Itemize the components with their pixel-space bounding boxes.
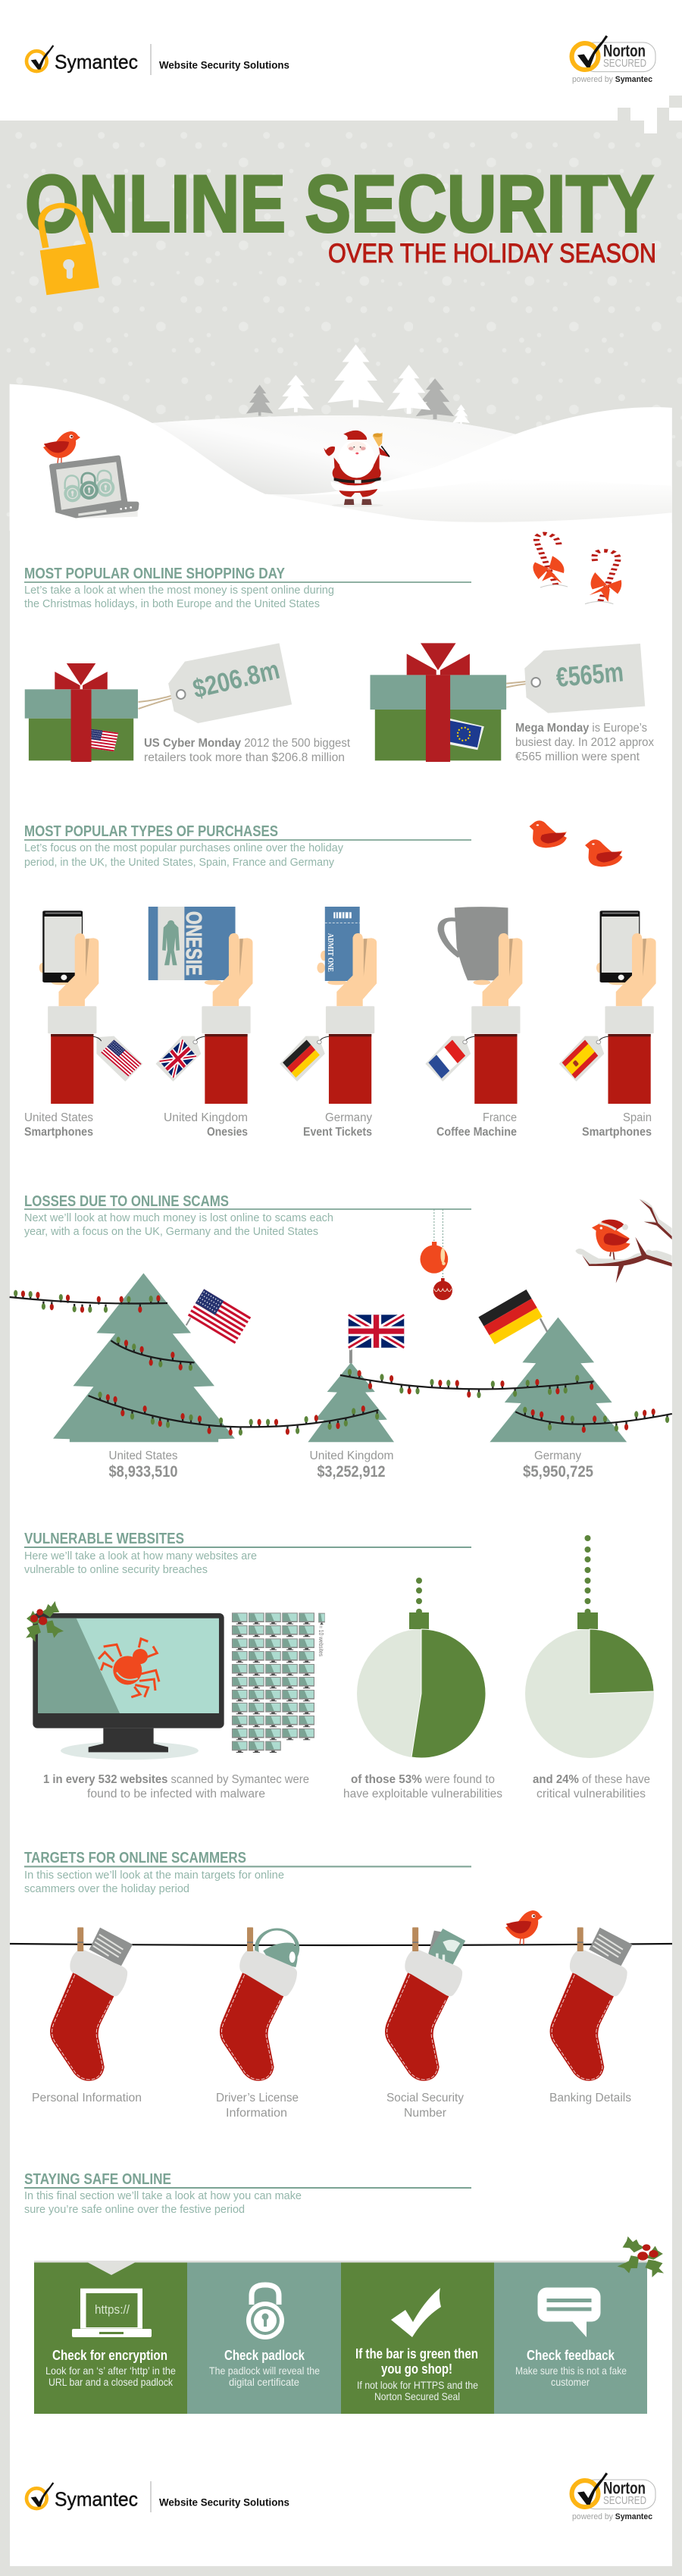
stocking labels xyxy=(32,2092,631,2120)
norton seal: powered by Symantec xyxy=(572,75,652,84)
intro text: Let’s focus on the most popular purchases online over the holiday xyxy=(24,842,344,854)
tip: check for encryption xyxy=(34,2262,187,2414)
caption: mega monday: Mega Monday is Europe’s xyxy=(515,722,647,735)
caption: critical: critical vulnerabilities xyxy=(537,1788,646,1800)
section: targets xyxy=(10,1850,672,2120)
caption: critical: and 24% of these have xyxy=(533,1773,650,1786)
intro text xyxy=(24,842,344,869)
label: onesie: ONESIE xyxy=(181,911,205,976)
stocking labels: Information xyxy=(226,2107,287,2120)
intro text: sure you’re safe online over the festive period xyxy=(24,2204,245,2216)
heading: TARGETS FOR ONLINE SCAMMERS xyxy=(24,1850,246,1866)
intro text: Next we’ll look at how much money is lost online to scams each xyxy=(24,1212,333,1224)
divider rule xyxy=(24,1547,471,1548)
bauble chart: 53% xyxy=(357,1578,486,1758)
symantec logo: Website Security Solutions xyxy=(159,59,289,71)
heading: VULNERABLE WEBSITES xyxy=(24,1531,184,1547)
purchase: spain smartphone xyxy=(559,910,656,1104)
stocking labels: Social Security xyxy=(386,2092,464,2104)
footer xyxy=(27,2473,655,2521)
caption: us cyber monday: US Cyber Monday 2012 the 500 biggest xyxy=(144,737,351,750)
tip: check feedback xyxy=(494,2262,647,2414)
tip: check padlock: The padlock will reveal the xyxy=(209,2364,320,2377)
labels: countries and products: Smartphones xyxy=(24,1126,93,1139)
trees xyxy=(246,344,470,425)
legend: 10 websites: = 10 websites xyxy=(318,1625,324,1656)
icon: candy canes xyxy=(533,534,621,604)
norton seal: Norton xyxy=(603,2479,646,2497)
section: vulnerable websites xyxy=(24,1531,654,1800)
tree: united kingdom xyxy=(308,1315,404,1442)
intro text: Let’s take a look at when the most money is spent online during xyxy=(24,584,334,597)
intro text: In this final section we’ll take a look at how you can make xyxy=(24,2190,302,2202)
section: purchases xyxy=(24,820,656,1139)
heading: STAYING SAFE ONLINE xyxy=(24,2171,171,2188)
purchase: france mug xyxy=(425,907,522,1104)
caption: exploitable: of those 53% were found to xyxy=(351,1773,495,1786)
stocking: personal information xyxy=(50,1927,133,2081)
stocking labels: Personal Information xyxy=(32,2092,142,2104)
labels: countries and products: France xyxy=(483,1111,517,1124)
symantec logo: Symantec xyxy=(55,51,138,74)
labels: countries and products xyxy=(24,1111,652,1139)
caption: malware: 1 in every 532 websites scanned by Symantec were xyxy=(43,1773,309,1786)
heading: MOST POPULAR ONLINE SHOPPING DAY xyxy=(24,566,286,582)
stocking: social security xyxy=(385,1927,465,2081)
intro text: period, in the UK, the United States, Spain, France and Germany xyxy=(24,857,335,869)
washing line xyxy=(10,1944,672,1945)
icon grid: 532 websites xyxy=(232,1612,325,1753)
icon: baubles xyxy=(420,1209,452,1300)
divider rule xyxy=(24,581,471,583)
intro text: scammers over the holiday period xyxy=(24,1883,189,1895)
stocking labels: Banking Details xyxy=(549,2092,631,2104)
tip: green bar: you go shop! xyxy=(381,2361,452,2377)
purchase: united states smartphone xyxy=(39,910,142,1104)
loss labels: $5,950,725 xyxy=(523,1463,593,1481)
tip: check padlock xyxy=(187,2262,341,2414)
labels: countries and products: Event Tickets xyxy=(303,1126,372,1139)
intro text: In this section we’ll look at the main targets for online xyxy=(24,1869,284,1882)
snow pattern xyxy=(0,129,682,523)
icon: padlock xyxy=(40,205,99,295)
white content panel xyxy=(10,523,672,2566)
tip: check padlock: digital certificate xyxy=(229,2376,299,2388)
price tag: europe: €565m xyxy=(555,656,624,693)
tip: check for encryption: Look for an ‘s’ after ‘http’ in the xyxy=(45,2364,176,2377)
tree: united states xyxy=(53,1273,251,1442)
divider rule xyxy=(24,1866,471,1867)
norton seal: SECURED xyxy=(603,57,646,70)
loss labels: $3,252,912 xyxy=(317,1463,385,1481)
loss labels xyxy=(109,1449,593,1481)
intro text: the Christmas holidays, in both Europe and the United States xyxy=(24,598,320,610)
tip: green bar: Norton Secured Seal xyxy=(374,2390,460,2402)
norton seal xyxy=(572,36,655,84)
intro text xyxy=(24,1550,257,1576)
intro text xyxy=(24,2190,302,2216)
icon: santa xyxy=(324,431,389,507)
icon: malware bug xyxy=(99,1639,159,1697)
divider rule xyxy=(24,1208,471,1210)
icon: bird on laptop xyxy=(43,431,80,463)
tip: check for encryption: Check for encryption xyxy=(52,2348,167,2363)
stocking: driver's license xyxy=(220,1927,298,2081)
divider rule xyxy=(24,2187,471,2189)
tip: check for encryption: https:// xyxy=(95,2302,130,2317)
bauble chart: 24% xyxy=(525,1535,654,1758)
loss labels: United States xyxy=(109,1449,178,1462)
intro text: year, with a focus on the UK, Germany and the United States xyxy=(24,1226,318,1238)
labels: countries and products: Onesies xyxy=(207,1126,248,1139)
tip: green bar: If not look for HTTPS and the xyxy=(357,2379,478,2391)
tip: check feedback: Check feedback xyxy=(527,2348,615,2363)
purchase: germany ticket xyxy=(280,907,377,1104)
caption: us cyber monday: retailers took more than $206.8 million xyxy=(144,751,345,764)
norton seal xyxy=(572,2473,655,2521)
symantec logo xyxy=(27,2481,289,2512)
tip: check padlock: Check padlock xyxy=(224,2348,305,2363)
icon: two birds xyxy=(530,820,622,867)
caption: malware: found to be infected with malware xyxy=(87,1788,265,1800)
labels: countries and products: Spain xyxy=(623,1111,652,1124)
heading: MOST POPULAR TYPES OF PURCHASES xyxy=(24,823,278,840)
norton seal: SECURED xyxy=(603,2494,646,2507)
pixel blocks xyxy=(618,96,682,133)
tip: green bar xyxy=(341,2262,494,2414)
icon: infected monitor xyxy=(33,1613,224,1760)
tip: check feedback: Make sure this is not a fake xyxy=(515,2364,627,2377)
snowy hills xyxy=(10,344,672,531)
intro text xyxy=(24,584,334,610)
icon: laptop with padlocks xyxy=(49,456,139,519)
stocking: banking details xyxy=(550,1927,633,2081)
caption: exploitable xyxy=(343,1773,502,1800)
price tag: us xyxy=(139,643,292,723)
norton seal: Norton xyxy=(603,41,646,61)
caption: malware xyxy=(43,1773,309,1800)
stocking labels: Number xyxy=(404,2107,446,2120)
icon: holly on monitor xyxy=(26,1601,64,1642)
label: admit one: ADMIT ONE xyxy=(326,933,335,972)
icon: bird on line xyxy=(505,1910,543,1945)
loss labels: $8,933,510 xyxy=(109,1463,177,1481)
icon: holly on panel xyxy=(618,2236,664,2277)
labels: countries and products: Coffee Machine xyxy=(436,1126,517,1139)
price tag: us: $206.8m xyxy=(190,655,283,704)
norton seal: powered by Symantec xyxy=(572,2512,652,2521)
purchase: united kingdom onesie xyxy=(149,907,252,1104)
caption: us cyber monday xyxy=(144,737,351,764)
panel: tips xyxy=(34,2261,647,2414)
labels: countries and products: Germany xyxy=(325,1111,372,1124)
labels: countries and products: Smartphones xyxy=(582,1126,652,1139)
divider rule xyxy=(24,839,471,841)
intro text xyxy=(24,1212,333,1238)
section: losses xyxy=(10,1193,672,1481)
tip: check feedback: customer xyxy=(551,2376,590,2388)
string lights xyxy=(10,1290,672,1436)
intro text: vulnerable to online security breaches xyxy=(24,1564,208,1576)
caption: mega monday: busiest day. In 2012 approx xyxy=(515,736,654,749)
symantec logo: Symantec xyxy=(55,2488,138,2511)
section: shopping day xyxy=(24,534,654,764)
heading: LOSSES DUE TO ONLINE SCAMS xyxy=(24,1193,229,1210)
labels: countries and products: United States xyxy=(24,1111,93,1124)
loss labels: United Kingdom xyxy=(309,1449,394,1462)
caption: critical xyxy=(533,1773,650,1800)
tip: green bar: If the bar is green then xyxy=(355,2346,478,2361)
gift: us xyxy=(25,663,138,762)
stocking labels: Driver’s License xyxy=(216,2092,299,2104)
tree: germany xyxy=(478,1290,627,1442)
caption: mega monday xyxy=(515,722,654,763)
section: staying safe xyxy=(24,2171,664,2414)
caption: mega monday: €565 million were spent xyxy=(515,751,640,763)
loss labels: Germany xyxy=(534,1449,581,1462)
header xyxy=(27,36,655,84)
gift: europe xyxy=(370,643,506,762)
symantec logo xyxy=(27,44,289,75)
price tag: europe xyxy=(506,644,645,713)
intro text: Here we’ll take a look at how many websites are xyxy=(24,1550,257,1562)
caption: exploitable: have exploitable vulnerabilities xyxy=(343,1788,502,1800)
labels: countries and products: United Kingdom xyxy=(164,1111,248,1124)
symantec logo: Website Security Solutions xyxy=(159,2496,289,2509)
tip: check for encryption: URL bar and a closed padlock xyxy=(48,2376,174,2388)
icon: robin on branch xyxy=(575,1199,672,1283)
intro text xyxy=(24,1869,284,1895)
